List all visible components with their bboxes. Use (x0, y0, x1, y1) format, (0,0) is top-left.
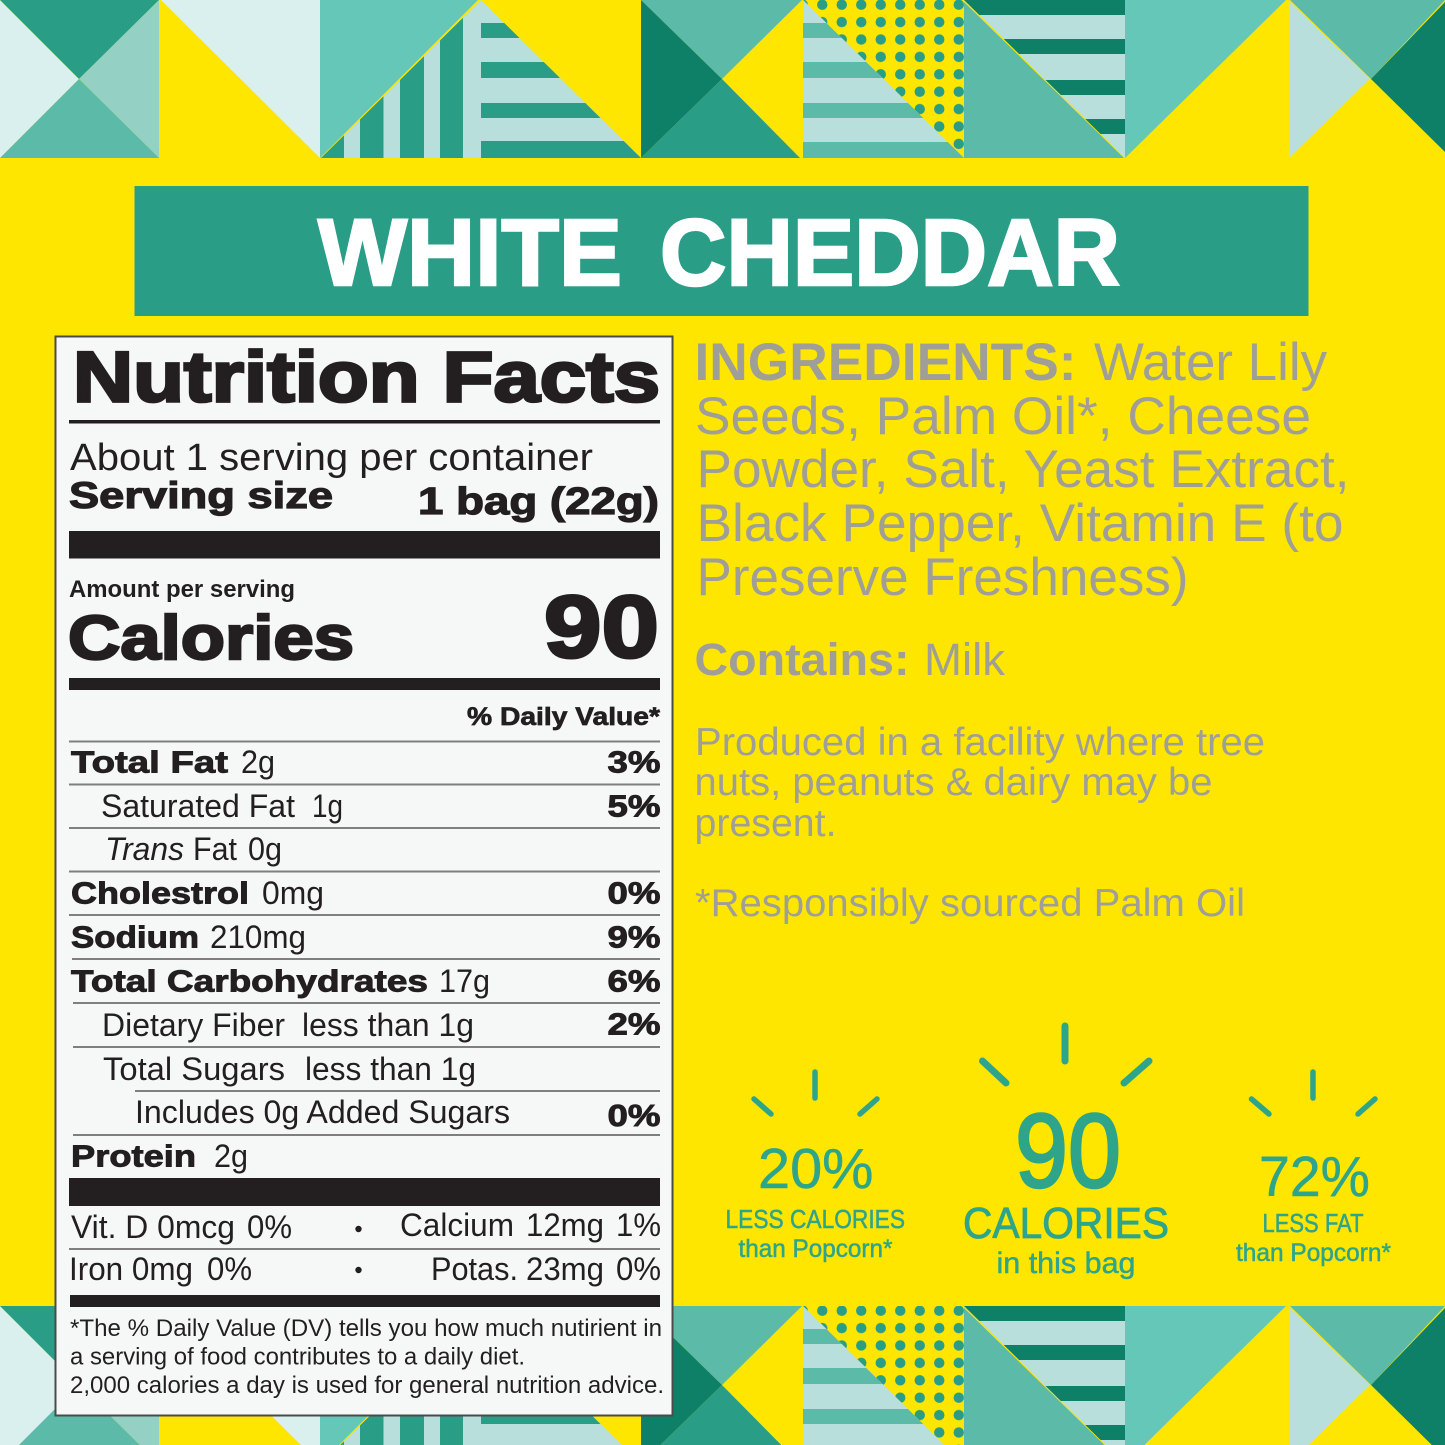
row: trans fat: Fat (193, 831, 237, 867)
row: total fat (71, 744, 660, 780)
row: iron and potassium: 0% (207, 1251, 252, 1287)
footnote (70, 1315, 664, 1399)
top geometric pattern band (0, 0, 1445, 158)
facility note: present. (694, 802, 836, 845)
callout: 72% less fat (1236, 1072, 1391, 1267)
icon: rays (982, 1026, 1149, 1083)
row: added sugars: 0% (608, 1098, 660, 1133)
servings per container: About 1 serving per container (70, 437, 593, 479)
allergen statement: Milk (924, 634, 1006, 685)
row: iron and potassium: 23mg (526, 1251, 604, 1287)
callout: 90 calories: in this bag (996, 1247, 1136, 1280)
row: saturated fat: Saturated Fat (101, 788, 295, 824)
callout: 20% less calories: than Popcorn* (738, 1235, 893, 1263)
row: cholesterol (71, 875, 660, 911)
row: dietary fiber: less than 1g (302, 1007, 474, 1043)
row: iron and potassium: Iron 0mg (69, 1251, 193, 1287)
row: sodium (71, 919, 660, 955)
row: iron and potassium (69, 1251, 661, 1287)
ingredients text block (694, 333, 1350, 607)
row: vitamin D and calcium: 12mg (526, 1207, 604, 1243)
serving size label: Serving size (69, 475, 333, 516)
row: dietary fiber: 2% (608, 1006, 660, 1042)
icon: rays (754, 1072, 877, 1114)
row: total carbohydrates (71, 963, 660, 999)
serving size value: 1 bag (22g) (418, 481, 659, 523)
row: vitamin D and calcium: 0% (247, 1209, 292, 1245)
row: iron and potassium: 0% (616, 1251, 661, 1287)
footnote: *The % Daily Value (DV) tells you how much nutirient in (70, 1315, 662, 1342)
row: vitamin D and calcium: Calcium (400, 1207, 514, 1243)
callout: 20% less calories (726, 1072, 905, 1263)
row: vitamin D and calcium: Vit. D 0mcg (71, 1209, 235, 1245)
footnote: a serving of food contributes to a daily diet. (70, 1344, 525, 1370)
row: protein: 2g (214, 1138, 248, 1174)
row: saturated fat: 5% (608, 788, 660, 824)
callout: 72% less fat: LESS FAT (1262, 1208, 1364, 1238)
footnote: 2,000 calories a day is used for general nutrition advice. (70, 1372, 664, 1399)
ingredients text block: Seeds, Palm Oil*, Cheese (695, 387, 1311, 446)
row: total carbohydrates: Total Carbohydrates (71, 964, 428, 998)
ingredients text block: INGREDIENTS: (694, 333, 1076, 392)
ingredients text block: Black Pepper, Vitamin E (to (696, 494, 1344, 553)
row: trans fat (105, 831, 282, 867)
calories label: Calories (68, 604, 354, 673)
row: added sugars: Includes 0g Added Sugars (135, 1094, 510, 1130)
title (318, 200, 1120, 306)
row: dietary fiber (102, 1006, 660, 1043)
callout: 72% less fat: than Popcorn* (1236, 1239, 1391, 1267)
callout: 90 calories (963, 1026, 1169, 1280)
facility note: nuts, peanuts & dairy may be (694, 761, 1212, 804)
row: saturated fat (101, 788, 660, 824)
callout: 72% less fat: 72% (1259, 1145, 1370, 1209)
row: total fat: 2g (241, 744, 275, 780)
row: total fat: 3% (608, 744, 660, 780)
heading: Nutrition Facts: Nutrition Facts (73, 338, 660, 418)
allergen statement (694, 634, 1006, 685)
row: total carbohydrates: 6% (608, 964, 660, 998)
bottom geometric pattern band (0, 1306, 1445, 1445)
daily value heading: % Daily Value* (467, 703, 660, 731)
row: saturated fat: 1g (312, 788, 343, 824)
row: sodium: 210mg (210, 919, 306, 955)
facility note (694, 721, 1265, 845)
calories value: 90 (544, 577, 659, 676)
title: CHEDDAR (660, 200, 1120, 306)
row: total sugars (103, 1051, 476, 1087)
row: dietary fiber: Dietary Fiber (102, 1007, 285, 1043)
callout: 20% less calories: 20% (758, 1137, 874, 1201)
callout: 90 calories: 90 (1015, 1093, 1121, 1210)
row: sodium: 9% (608, 920, 660, 954)
row: cholesterol: Cholestrol (71, 876, 249, 910)
allergen statement: Contains: (694, 634, 910, 685)
row: added sugars (135, 1094, 660, 1133)
icon: rays (1252, 1072, 1375, 1114)
title: WHITE (318, 200, 622, 306)
row: vitamin D and calcium: 1% (616, 1207, 661, 1243)
row: trans fat: Trans (105, 831, 184, 867)
row: total sugars: less than 1g (305, 1051, 476, 1087)
palm oil note: *Responsibly sourced Palm Oil (695, 882, 1245, 925)
ingredients text block: Powder, Salt, Yeast Extract, (696, 440, 1350, 499)
row: total sugars: Total Sugars (103, 1051, 285, 1087)
title banner (134, 186, 1308, 316)
row: total fat: Total Fat (71, 744, 228, 780)
row: vitamin D and calcium (71, 1207, 661, 1245)
row: protein (71, 1138, 248, 1174)
row: cholesterol: 0mg (262, 875, 324, 911)
ingredients text block: Preserve Freshness) (696, 548, 1188, 607)
row: protein: Protein (71, 1138, 196, 1174)
row: iron and potassium: Potas. (431, 1251, 518, 1287)
facility note: Produced in a facility where tree (695, 721, 1265, 764)
row: sodium: Sodium (71, 920, 199, 954)
callout: 90 calories: CALORIES (963, 1199, 1169, 1248)
row: cholesterol: 0% (608, 876, 660, 910)
panel: nutrition facts (56, 336, 672, 1416)
row: trans fat: 0g (248, 831, 282, 867)
callout: 20% less calories: LESS CALORIES (726, 1204, 905, 1234)
amount per serving: Amount per serving (69, 576, 295, 603)
row: total carbohydrates: 17g (439, 963, 490, 999)
ingredients text block: Water Lily (1094, 333, 1327, 392)
